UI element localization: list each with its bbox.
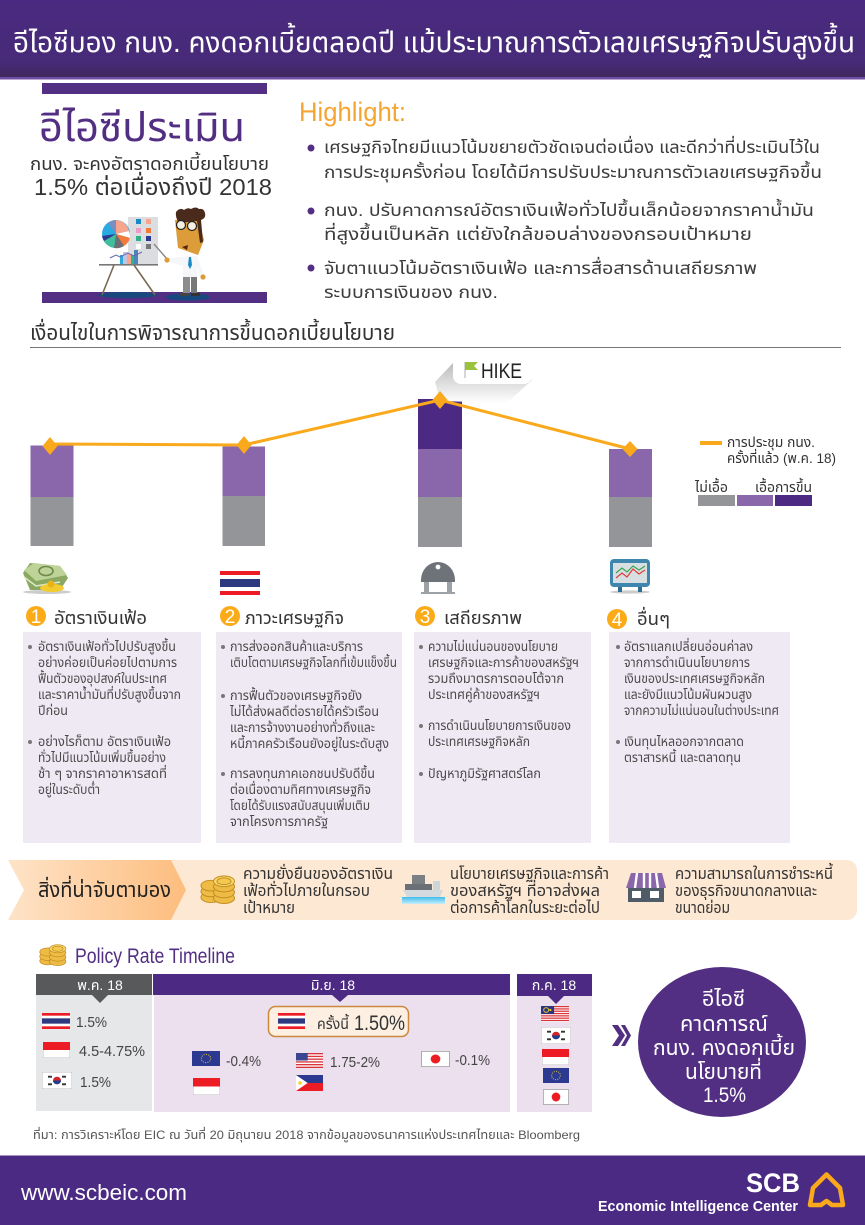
panel: EIC assessment	[30, 83, 272, 303]
legend: เอื้อการขึ้น	[755, 477, 812, 495]
callout: EIC forecast: 1.5%	[703, 1084, 746, 1107]
panel: economy: เติบโตตามเศรษฐกิจโลกที่เข้มแข็งขึ้น	[230, 653, 397, 670]
icon: presenter with charts	[98, 208, 210, 300]
heading 3: stability	[415, 606, 522, 628]
heading 2: economy: 2	[225, 607, 235, 628]
icon: bank building	[421, 562, 455, 594]
callout: EIC forecast: คาดการณ์	[680, 1013, 768, 1036]
bullet two: ที่สูงขึ้นเป็นหลัก แต่ยังใกล้ขอบล่างของกรอบเป้าหมาย	[324, 222, 752, 246]
timeline: May 2018	[36, 974, 152, 1111]
bullet two	[308, 198, 814, 246]
callout: EIC forecast: อีไอซี	[702, 988, 745, 1011]
header banner	[0, 0, 865, 80]
us rate: 1.75-2%	[330, 1054, 380, 1071]
bar: others	[609, 449, 652, 547]
japan flag	[543, 1089, 569, 1105]
icon: shop	[626, 873, 666, 902]
watch item one	[243, 863, 393, 917]
bar: stability	[418, 399, 462, 547]
bullet three: ระบบการเงินของ กนง.	[324, 283, 498, 302]
watch item three: ของธุรกิจขนาดกลางและ	[675, 883, 817, 900]
callout: hike: HIKE	[481, 360, 522, 383]
timeline: June 2018	[153, 974, 510, 1112]
panel: inflation	[23, 632, 201, 843]
title: อีไอซีมอง กนง. คงดอกเบี้ยตลอดปี แม้ประมาณการตัวเลขเศรษฐกิจปรับสูงขึ้น	[13, 22, 855, 60]
watch item two: ของสหรัฐฯ ที่อาจส่งผล	[450, 879, 600, 900]
watch item two	[450, 866, 609, 917]
panel: economy: ไม่ได้ส่งผลดีต่อรายได้ครัวเรือน	[229, 704, 379, 719]
callout: EIC forecast: นโยบายที่	[685, 1057, 762, 1084]
heading 2: economy: ภาวะเศรษฐกิจ	[245, 608, 344, 628]
website: www.scbeic.com	[20, 1180, 187, 1205]
icon: market monitor	[610, 559, 650, 594]
euro flag	[543, 1068, 569, 1083]
source note: ที่มา: การวิเคราะห์โดย EIC ณ วันที่ 20 มิถุนายน 2018 จากข้อมูลของธนาคารแห่งประเทศไทยและ Bloomberg	[33, 1126, 580, 1142]
stacked bar chart	[30, 356, 836, 547]
footer	[0, 1155, 865, 1225]
arrow: double chevron	[612, 1025, 631, 1046]
timeline heading: Policy Rate Timeline	[75, 945, 235, 968]
bullet one	[308, 135, 822, 183]
watch item two: ต่อการค้าโลกในระยะต่อไป	[450, 899, 600, 917]
korea flag	[541, 1027, 571, 1044]
callout: this meeting: 1.50%	[354, 1012, 405, 1035]
heading 1: inflation: 1	[31, 607, 41, 628]
panel: economy	[216, 632, 402, 843]
heading: Highlight: Highlight:	[299, 97, 406, 127]
bar: economy	[222, 446, 265, 546]
legend: ครั้งที่แล้ว (พ.ค. 18)	[727, 448, 836, 466]
brand name	[598, 1168, 800, 1215]
panel: inflation: ทั่วไปมีแนวโน้มเพิ่มขึ้นอย่าง	[38, 748, 166, 765]
section heading: policy rate hike conditions: เงื่อนไขในการพิจารณาการขึ้นดอกเบี้ยนโยบาย	[30, 318, 395, 345]
watch item three: ขนาดย่อม	[675, 899, 730, 917]
panel: others: จากความไม่แน่นอนในต่างประเทศ	[624, 703, 779, 718]
panel: stability: เศรษฐกิจและการค้าของสหรัฐฯ	[428, 655, 579, 670]
timeline: May 2018: พ.ค. 18	[77, 977, 123, 993]
panel: others: อัตราแลกเปลี่ยนอ่อนค่าลง	[624, 637, 753, 654]
heading 3: stability: 3	[420, 607, 430, 628]
heading 3: stability: เสถียรภาพ	[444, 608, 522, 628]
watch item one: ความยั่งยืนของอัตราเงิน	[243, 863, 393, 883]
panel: inflation: อย่างค่อยเป็นค่อยไปตามการ	[38, 655, 177, 670]
euro rate: -0.4%	[226, 1053, 261, 1070]
timeline: June 2018: มิ.ย. 18	[311, 977, 355, 993]
brand name: Economic Intelligence Center	[598, 1198, 798, 1215]
panel: others: จากการดำเนินนโยบายการ	[624, 655, 750, 670]
bullet one: เศรษฐกิจไทยมีแนวโน้มขยายตัวชัดเจนต่อเนื่อง และดีกว่าที่ประเมินไว้ใน	[324, 135, 820, 157]
chevron label: สิ่งที่น่าจับตามอง	[38, 875, 171, 902]
panel: stability: การดำเนินนโยบายการเงินของ	[428, 718, 571, 733]
korea rate: 1.5%	[80, 1074, 111, 1091]
icon: money	[23, 563, 71, 594]
panel: others: ตราสารหนี้ และตลาดทุน	[624, 748, 741, 765]
panel: things to watch	[8, 860, 857, 920]
panel: others: และยังมีแนวโน้มผันผวนสูง	[624, 687, 752, 702]
line: previous meeting	[42, 391, 638, 457]
panel: inflation: ปีก่อน	[38, 703, 68, 718]
panel: economy: การส่งออกสินค้าและบริการ	[230, 639, 363, 654]
panel: economy: และการจ้างงานอย่างทั่วถึงและ	[230, 719, 375, 735]
philippines flag	[296, 1075, 323, 1091]
watch item two: นโยบายเศรษฐกิจและการค้า	[450, 866, 609, 883]
watch item three	[675, 862, 833, 917]
callout: hike	[435, 356, 532, 403]
panel: stability: ความไม่แน่นอนของนโยบาย	[428, 639, 558, 654]
callout: EIC forecast: กนง. คงดอกเบี้ย	[653, 1033, 795, 1060]
panel: economy: ต่อเนื่องตามทิศทางเศรษฐกิจ	[230, 780, 371, 797]
heading 4: others	[607, 606, 670, 631]
panel: others: เงินของประเทศเศรษฐกิจหลัก	[624, 671, 765, 686]
panel: inflation: ช้า ๆ จากราคาอาหารสดที่	[38, 764, 167, 781]
bullet one: การประชุมครั้งก่อน โดยได้มีการปรับประมาณการตัวเลขเศรษฐกิจขึ้น	[324, 160, 822, 183]
heading 4: others: 4	[612, 610, 623, 631]
indonesia flag	[542, 1049, 569, 1065]
bullet three	[308, 256, 757, 302]
bar: inflation	[30, 446, 74, 546]
panel: others	[609, 632, 790, 843]
malaysia flag	[541, 1006, 569, 1022]
brand name: SCB	[746, 1168, 800, 1198]
legend: การประชุม กนง.	[727, 434, 815, 451]
panel: economy: หนี้ภาคครัวเรือนยังอยู่ในระดับสูง	[230, 734, 389, 751]
indonesia flag	[193, 1078, 220, 1095]
panel: inflation: ฟื้นตัวของอุปสงค์ในประเทศ	[38, 669, 167, 686]
japan rate: -0.1%	[455, 1052, 490, 1069]
heading: EIC assessment: อีไอซีประเมิน	[39, 106, 245, 150]
icon: thai flag	[220, 571, 260, 595]
panel: economy: โดยได้รับแรงสนับสนุนเพิ่มเติม	[230, 797, 370, 813]
panel: inflation: อย่างไรก็ตาม อัตราเงินเฟ้อ	[38, 734, 171, 749]
panel: stability: ประเทศเศรษฐกิจหลัก	[428, 734, 530, 749]
panel: highlight	[299, 97, 822, 302]
watch item one: เฟ้อทั่วไปภายในกรอบ	[243, 880, 370, 900]
euro rate	[192, 1051, 261, 1070]
panel: economy: จากโครงการภาครัฐ	[230, 814, 328, 829]
subheading	[30, 151, 272, 200]
panel: stability	[414, 632, 591, 843]
subheading: กนง. จะคงอัตราดอกเบี้ยนโยบาย	[30, 151, 269, 174]
heading 1: inflation	[26, 606, 147, 628]
timeline: July 2018	[517, 974, 592, 1112]
icon: SCB logo	[810, 1174, 843, 1205]
panel: inflation: และราคาน้ำมันที่ปรับสูงขึ้นจาก	[38, 685, 181, 702]
panel: stability: ประเทศคู่ค้าของสหรัฐฯ	[428, 687, 540, 702]
icon: coins	[201, 876, 234, 904]
japan rate	[421, 1051, 490, 1069]
panel: stability: รวมถึงมาตรการตอบโต้จาก	[428, 671, 564, 686]
legend	[694, 434, 836, 506]
chevron label	[8, 860, 186, 920]
panel: stability: ปัญหาภูมิรัฐศาสตร์โลก	[428, 766, 541, 781]
watch item three: ความสามารถในการชำระหนี้	[675, 862, 833, 883]
bullet three: จับตาแนวโน้มอัตราเงินเฟ้อ และการสื่อสารด้านเสถียรภาพ	[324, 256, 757, 278]
subheading: 1.5% ต่อเนื่องถึงปี 2018	[34, 171, 272, 200]
panel: others: เงินทุนไหลออกจากตลาด	[624, 734, 744, 749]
timeline: July 2018: ก.ค. 18	[532, 977, 576, 993]
panel: economy: การลงทุนภาคเอกชนปรับดีขึ้น	[230, 764, 375, 781]
thailand rate: 1.5%	[76, 1014, 107, 1031]
icon: cargo ship	[402, 875, 445, 904]
callout: this meeting	[268, 1006, 408, 1036]
heading 4: others: อื่นๆ	[637, 606, 670, 629]
us rate	[296, 1053, 380, 1071]
callout: this meeting: ครั้งนี้	[317, 1013, 349, 1033]
panel: inflation: อัตราเงินเฟ้อทั่วไปปรับสูงขึ้น	[38, 637, 176, 654]
heading 1: inflation: อัตราเงินเฟ้อ	[54, 608, 147, 628]
indonesia rate: 4.5-4.75%	[79, 1043, 145, 1060]
legend: ไม่เอื้อ	[694, 477, 728, 495]
panel: economy: การฟื้นตัวของเศรษฐกิจยัง	[230, 686, 362, 703]
bullet two: กนง. ปรับคาดการณ์อัตราเงินเฟ้อทั่วไปขึ้นเล็กน้อยจากราคาน้ำมัน	[324, 198, 814, 220]
callout: EIC forecast	[638, 967, 806, 1117]
panel: inflation: อยู่ในระดับต่ำ	[38, 780, 100, 797]
watch item one: เป้าหมาย	[243, 899, 295, 917]
